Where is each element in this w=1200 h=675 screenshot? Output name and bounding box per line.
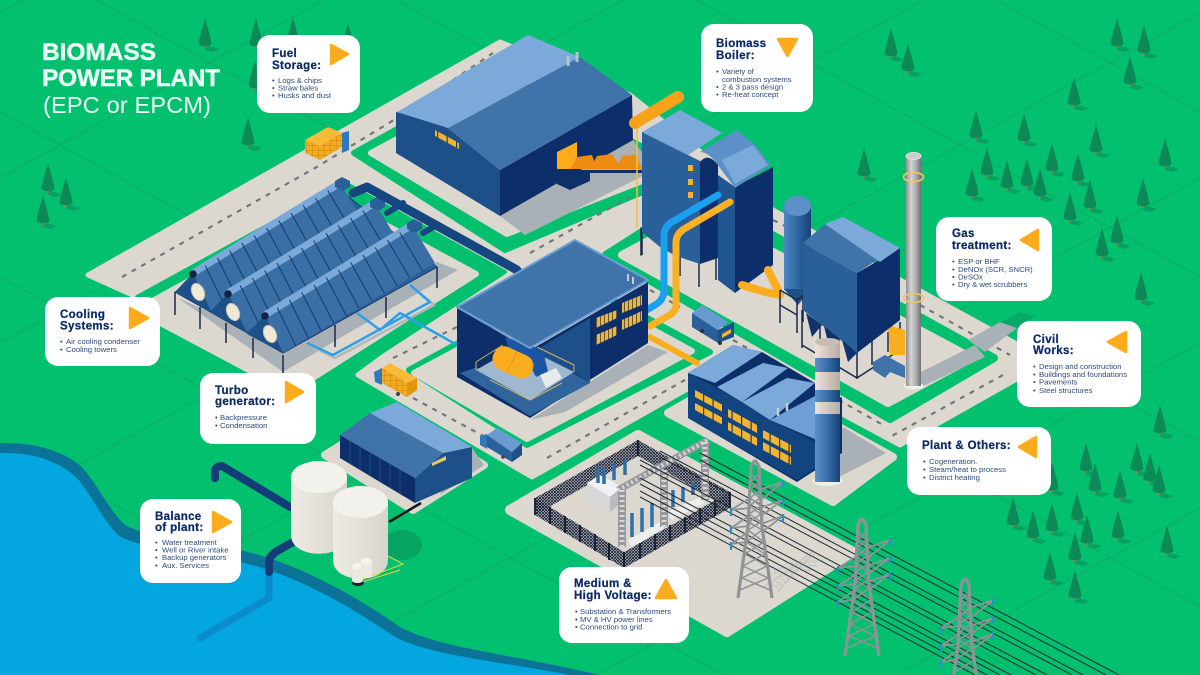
card: civil works: • bbox=[1033, 362, 1036, 371]
card: biomass boiler: • bbox=[716, 82, 719, 92]
fence posts bbox=[535, 440, 730, 568]
card: civil works: • bbox=[1033, 386, 1036, 395]
card: gas treatment: • bbox=[952, 272, 955, 282]
card: plant and others: • bbox=[923, 465, 926, 474]
cooling shadow bbox=[178, 262, 458, 372]
boiler lights bbox=[688, 165, 693, 198]
cooling prism 1 bbox=[175, 177, 363, 311]
boiler top bbox=[642, 110, 722, 155]
card: cooling systems: • bbox=[60, 337, 63, 346]
card: cooling systems bbox=[45, 297, 160, 366]
card: biomass boiler: • bbox=[716, 67, 719, 76]
card: cooling systems: Air cooling condenser bbox=[66, 337, 140, 346]
pylon one bbox=[731, 460, 783, 598]
storage gable wall bbox=[396, 112, 500, 216]
card: gas treatment: • bbox=[952, 257, 955, 266]
plate: substation bbox=[510, 435, 853, 632]
boiler arch bbox=[700, 158, 718, 264]
substation back fences bbox=[535, 440, 638, 515]
boiler column bbox=[718, 175, 735, 293]
card: turbo generator: • bbox=[215, 421, 218, 430]
card: plant and others: Steam/heat to process bbox=[929, 465, 1006, 474]
card: gas treatment: DeSOx bbox=[958, 272, 983, 282]
substation front fences bbox=[624, 492, 730, 568]
plate: stack building bbox=[668, 372, 893, 502]
stack house front wall bbox=[688, 373, 815, 480]
card: plant and others: • bbox=[923, 473, 926, 482]
service tanks and yellow lines bbox=[352, 556, 403, 586]
stack house back bbox=[688, 345, 842, 482]
stack house windows bbox=[695, 390, 791, 465]
hall inner back wall bbox=[533, 318, 590, 383]
switchgear boxes bbox=[628, 497, 704, 548]
card: civil works: Works: bbox=[1033, 345, 1074, 357]
storage vents bbox=[568, 52, 577, 66]
chimney bbox=[812, 338, 842, 486]
card: cooling systems: • bbox=[60, 345, 63, 354]
card: medium and high voltage: Medium & bbox=[574, 578, 632, 590]
hall shell bbox=[457, 282, 648, 418]
cooling supports bbox=[175, 267, 437, 378]
warehouse wall bbox=[340, 435, 415, 503]
card: balance of plant: Balance bbox=[155, 511, 202, 523]
card: fuel storage: Fuel bbox=[272, 48, 297, 60]
ground shadows bbox=[440, 140, 1035, 495]
storage windows bbox=[435, 130, 459, 149]
card: plant and others bbox=[907, 427, 1051, 495]
card: medium and high voltage bbox=[559, 567, 689, 643]
building: fuel storage bbox=[396, 35, 633, 216]
card: gas treatment: • bbox=[952, 265, 955, 274]
tank ground shadow bbox=[382, 530, 422, 560]
card: fuel storage: • bbox=[272, 84, 275, 92]
card: biomass boiler: Variety of bbox=[722, 67, 755, 76]
truck: straw bales lower bbox=[374, 363, 417, 397]
card: turbo generator: Condensation bbox=[220, 421, 267, 430]
storage light roof bbox=[397, 35, 580, 128]
biomass feed pipe bbox=[635, 97, 678, 255]
warehouse mid roof bbox=[340, 413, 443, 478]
cooling prism 2 bbox=[210, 197, 398, 331]
hall vents bbox=[628, 274, 633, 284]
card: plant and others: Plant & Others: bbox=[922, 440, 1011, 452]
card: cooling systems: Cooling bbox=[60, 309, 105, 321]
card: gas treatment: Gas bbox=[952, 228, 975, 240]
pylon two bbox=[838, 518, 890, 656]
card: cooling systems: Systems: bbox=[60, 320, 114, 332]
card: turbo generator: Turbo bbox=[215, 385, 248, 397]
drain line bbox=[389, 503, 421, 522]
card: balance of plant: Water treatment bbox=[162, 538, 218, 547]
card: balance of plant: Aux. Services bbox=[162, 561, 209, 570]
gantry bbox=[618, 440, 708, 547]
building: turbine hall bbox=[457, 240, 648, 418]
card: civil works bbox=[1017, 321, 1141, 407]
water tanks bbox=[291, 461, 403, 586]
stack ring top bbox=[904, 172, 924, 182]
hall railing bbox=[476, 345, 574, 400]
substation bbox=[535, 440, 730, 568]
plate: boiler and gas treatment with green ring bbox=[606, 195, 994, 419]
boiler right wall bbox=[735, 167, 773, 293]
filter right wall bbox=[857, 248, 900, 353]
building: biomass boiler bbox=[642, 110, 773, 293]
generator casing bbox=[489, 343, 537, 382]
title: BIOMASS bbox=[42, 39, 156, 66]
card: medium and high voltage: MV & HV power lines bbox=[580, 615, 653, 624]
card: gas treatment: DeNOx (SCR, SNCR) bbox=[958, 265, 1033, 274]
card: turbo generator bbox=[200, 373, 316, 444]
card: civil works: • bbox=[1033, 370, 1036, 379]
card: fuel storage: Straw bales bbox=[278, 84, 318, 92]
card: civil works: Civil bbox=[1033, 334, 1059, 346]
cylinder vessel bbox=[780, 196, 811, 333]
card: plant and others: Cogeneration. bbox=[929, 457, 977, 466]
card: plant and others: District heating bbox=[929, 473, 980, 482]
card: gas treatment: ESP or BHF bbox=[958, 257, 1000, 266]
card: fuel storage: • bbox=[272, 91, 275, 100]
card: fuel storage: Logs & chips bbox=[278, 76, 322, 85]
card: biomass boiler: • bbox=[716, 90, 719, 99]
card: balance of plant: • bbox=[155, 553, 158, 562]
card: gas treatment: treatment: bbox=[952, 240, 1012, 252]
building: stack house bbox=[688, 345, 842, 482]
card: medium and high voltage: Substation & Transformers bbox=[580, 607, 671, 616]
plate: fuel storage with green ring bbox=[354, 72, 690, 250]
filter frame bbox=[802, 310, 900, 379]
boiler legs bbox=[642, 230, 716, 287]
transformer bbox=[587, 475, 622, 512]
card: biomass boiler: Re-heat concept bbox=[722, 90, 779, 99]
card: medium and high voltage: High Voltage: bbox=[574, 590, 652, 602]
pylon three bbox=[941, 578, 993, 675]
steam and flue pipes bbox=[640, 195, 780, 363]
card: biomass boiler: Boiler: bbox=[716, 50, 755, 62]
blue truck by boiler bbox=[692, 305, 734, 345]
card: balance of plant: of plant: bbox=[155, 522, 204, 534]
plate: turbine hall with green ring bbox=[409, 279, 710, 445]
card: fuel storage: Storage: bbox=[272, 60, 321, 72]
cooling systems: air cooled condenser bbox=[175, 177, 517, 378]
storage mid roof bbox=[448, 57, 632, 170]
stack house vents bbox=[778, 403, 787, 416]
storage side wall bbox=[500, 95, 633, 216]
card: fuel storage: • bbox=[272, 76, 275, 85]
card: fuel storage: Husks and dust bbox=[278, 91, 332, 100]
filter duct box bbox=[873, 355, 905, 378]
card: fuel storage bbox=[257, 35, 360, 113]
road network pavement bbox=[88, 42, 1015, 477]
card: plant and others: • bbox=[923, 457, 926, 466]
hall duct bbox=[505, 337, 548, 377]
conveyor with biomass bbox=[557, 142, 642, 190]
card: gas treatment: • bbox=[952, 280, 955, 289]
road centre dashes bbox=[122, 53, 1010, 458]
building: gas treatment filter bbox=[802, 217, 905, 379]
stack ring bottom bbox=[904, 294, 924, 302]
card: civil works: Design and construction bbox=[1039, 362, 1121, 371]
card: biomass boiler: combustion systems bbox=[722, 75, 792, 84]
filter yellow duct bbox=[888, 325, 905, 355]
plate: warehouse bbox=[325, 412, 484, 510]
card: balance of plant: • bbox=[155, 561, 158, 570]
card: balance of plant bbox=[140, 499, 241, 583]
water tank left bbox=[291, 461, 347, 554]
main stack bbox=[904, 152, 924, 390]
card: biomass boiler: 2 & 3 pass design bbox=[722, 82, 783, 92]
card: civil works: Pavements bbox=[1039, 378, 1078, 386]
hall platform bbox=[476, 345, 574, 400]
card: civil works: • bbox=[1033, 378, 1036, 386]
card: gas treatment bbox=[936, 217, 1052, 301]
building: warehouse bbox=[340, 402, 472, 503]
card: turbo generator: generator: bbox=[215, 396, 275, 408]
card: balance of plant: Well or River intake bbox=[162, 546, 229, 554]
cooling base deck bbox=[175, 190, 437, 353]
card: biomass boiler bbox=[701, 24, 813, 112]
boiler left wall bbox=[642, 132, 718, 264]
water: river with dark bank bbox=[0, 443, 600, 675]
warehouse gable bbox=[415, 447, 472, 503]
filter left wall bbox=[803, 243, 857, 353]
filter light roof bbox=[825, 217, 900, 262]
hall windows bbox=[596, 295, 642, 345]
card: balance of plant: • bbox=[155, 538, 158, 547]
title bbox=[42, 39, 220, 118]
title: POWER PLANT bbox=[42, 65, 220, 92]
plate: cooling area with green ring bbox=[132, 183, 505, 400]
stack house roofs bbox=[688, 345, 762, 383]
cooling water pipes bbox=[307, 285, 457, 358]
truck: blue lower bbox=[480, 428, 522, 462]
generator base bbox=[540, 368, 562, 388]
card: civil works: Buildings and foundations bbox=[1039, 370, 1127, 379]
filter medium roof bbox=[803, 224, 880, 273]
card: medium and high voltage: • bbox=[575, 615, 578, 624]
card: civil works: Steel structures bbox=[1039, 386, 1093, 395]
hall roof bbox=[457, 240, 648, 348]
truck: straw bales upper bbox=[305, 127, 349, 160]
cooling header pipe bbox=[353, 187, 517, 270]
pylon shadow bbox=[757, 549, 829, 593]
warehouse sign bbox=[432, 456, 446, 466]
card: balance of plant: • bbox=[155, 546, 158, 554]
card: balance of plant: Backup generators bbox=[162, 553, 227, 562]
card: medium and high voltage: Connection to grid bbox=[580, 622, 642, 632]
card: medium and high voltage: • bbox=[575, 607, 578, 616]
card: gas treatment: Dry & wet scrubbers bbox=[958, 280, 1027, 289]
hall slab bbox=[460, 368, 590, 416]
water tank right bbox=[333, 486, 388, 579]
cooling prism 3 bbox=[247, 219, 435, 353]
title: (EPC or EPCM) bbox=[43, 92, 211, 118]
card: turbo generator: • bbox=[215, 413, 218, 422]
insulators bbox=[598, 460, 693, 537]
card: medium and high voltage: • bbox=[575, 622, 578, 632]
card: turbo generator: Backpressure bbox=[220, 413, 267, 422]
filter hoppers bbox=[806, 313, 857, 362]
boiler hood bbox=[700, 130, 770, 188]
card: cooling systems: Cooling towers bbox=[66, 345, 117, 354]
warehouse light roof bbox=[370, 402, 472, 453]
intake pipes bbox=[215, 466, 302, 572]
power lines bbox=[640, 451, 1119, 675]
card: biomass boiler: Biomass bbox=[716, 38, 766, 50]
